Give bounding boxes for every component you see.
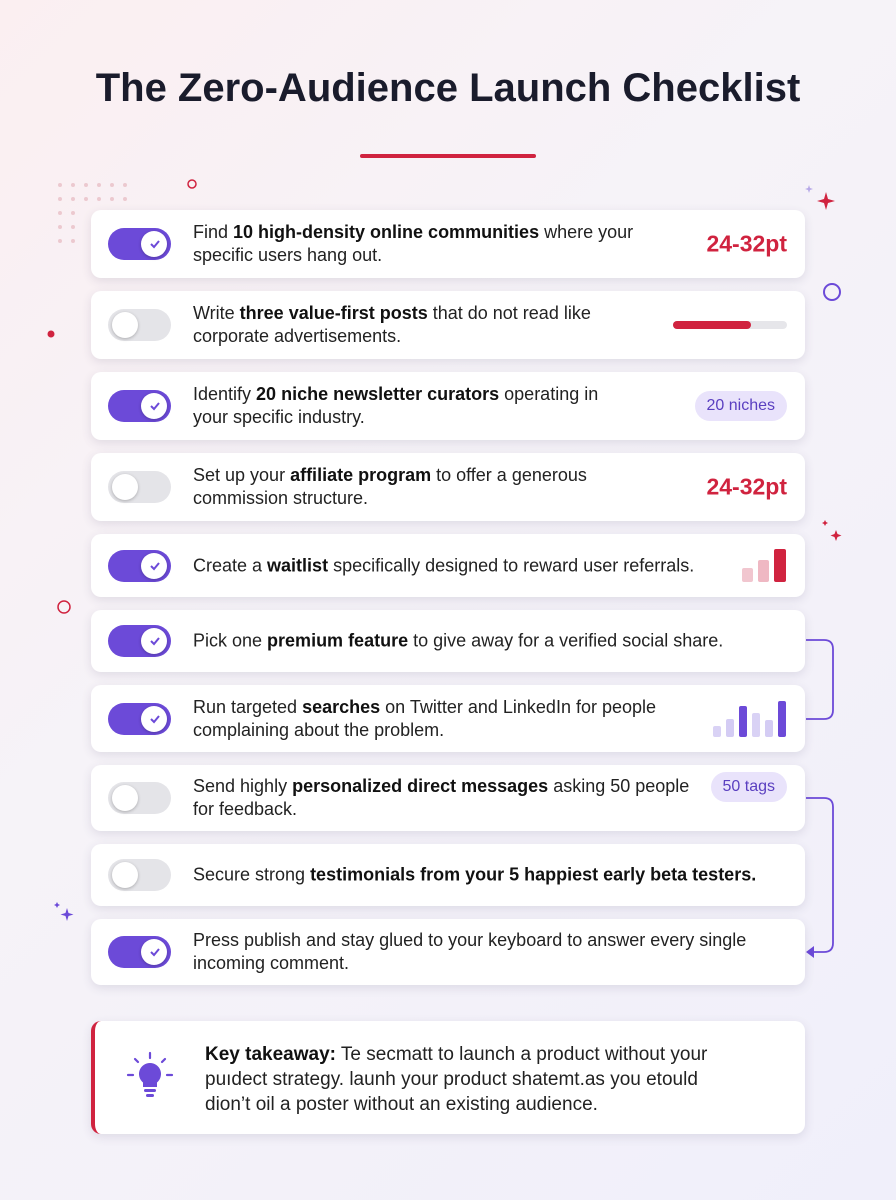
card 4: [91, 453, 805, 521]
connector brackets: [806, 639, 834, 958]
card 9: [91, 844, 805, 906]
card 2: Write three value-first posts that do not read like corporate advertisements.: [193, 303, 591, 346]
card 5: [91, 534, 805, 597]
card 7: [91, 685, 805, 752]
card 9: Secure strong testimonials from your 5 happiest early beta testers.: [193, 864, 756, 884]
title underline: [360, 154, 536, 158]
card 1: 24-32pt: [706, 230, 787, 256]
card 6: [91, 610, 805, 672]
progress bar: [673, 321, 787, 329]
card 10: Press publish and stay glued to your keyboard to answer every single incoming comment.: [193, 930, 746, 973]
card 5: Create a waitlist specifically designed to reward user referrals.: [193, 555, 694, 575]
bar chart icon: [742, 549, 786, 582]
card 1: [91, 210, 805, 278]
card 3: 20 niches: [706, 397, 775, 414]
card 8: Send highly personalized direct messages asking 50 people for feedback.: [193, 776, 689, 819]
takeaway text: Key takeaway: Te secmatt to launch a product without your puıdect strategy. launh your product shatemt.as you etould dion’t oil a poster without an existing audience.: [205, 1044, 707, 1115]
card 4: Set up your affiliate program to offer a generous commission structure.: [193, 465, 587, 508]
card 1: Find 10 high-density online communities where your specific users hang out.: [193, 222, 633, 265]
card 6: Pick one premium feature to give away for a verified social share.: [193, 630, 723, 650]
key takeaway panel: [91, 1021, 805, 1134]
bar chart icon: [713, 701, 786, 737]
card 7: Run targeted searches on Twitter and LinkedIn for people complaining about the problem.: [193, 696, 656, 740]
card 10: [91, 919, 805, 985]
card 3: [91, 372, 805, 440]
card 4: 24-32pt: [706, 474, 787, 500]
title: The Zero-Audience Launch Checklist: [96, 66, 800, 110]
icon: lightbulb: [126, 1052, 174, 1097]
card 8: [91, 765, 805, 831]
card 3: Identify 20 niche newsletter curators operating in your specific industry.: [193, 384, 598, 427]
card 2: [91, 291, 805, 359]
card 8: 50 tags: [723, 778, 775, 795]
